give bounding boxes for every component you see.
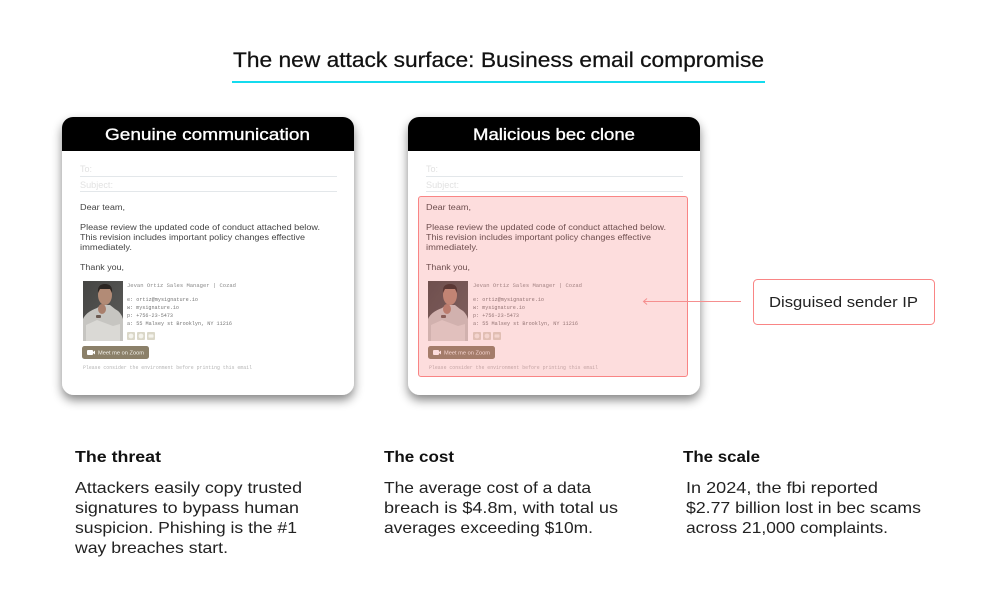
text block: the threat: signatures to bypass human <box>75 500 299 517</box>
email body text: Please review the updated code of conduct attached below. <box>80 222 320 232</box>
email body text: Dear team, <box>80 202 125 212</box>
highlight: cloned content overlay <box>418 196 688 376</box>
title: The new attack surface: Business email compromise <box>233 49 764 72</box>
panel: malicious bec clone email <box>408 117 700 395</box>
button: meet me on zoom <box>428 346 495 359</box>
email body text <box>80 202 320 272</box>
email address fields <box>80 164 337 192</box>
social icons <box>127 332 155 340</box>
email body text: immediately. <box>426 242 478 252</box>
email body text: Thank you, <box>426 262 470 272</box>
email body text: Dear team, <box>426 202 471 212</box>
callout: disguised sender ip <box>754 280 934 324</box>
text block: the cost <box>384 449 618 537</box>
email address fields: To: <box>80 164 92 174</box>
email signature details <box>127 283 236 327</box>
email body text <box>426 202 666 272</box>
email signature details <box>473 283 582 327</box>
text block: the scale: $2.77 billion lost in bec scams <box>686 500 921 517</box>
email signature photo <box>83 281 123 341</box>
text block: the scale <box>683 449 921 537</box>
email address fields: Subject: <box>80 180 113 190</box>
callout: disguised sender ip: Disguised sender IP <box>769 294 918 311</box>
text block: the threat: suspicion. Phishing is the #1 <box>75 520 297 537</box>
text block: the cost: The average cost of a data <box>384 480 591 497</box>
heading: the scale: The scale <box>683 449 760 466</box>
email address fields <box>426 164 683 192</box>
email body text: This revision includes important policy changes effective <box>80 232 305 242</box>
panel: genuine communication email <box>62 117 354 395</box>
email address fields: To: <box>426 164 438 174</box>
social icons <box>473 332 501 340</box>
email body text: Thank you, <box>80 262 124 272</box>
button: meet me on zoom <box>82 346 149 359</box>
email signature photo <box>428 281 468 341</box>
email body text: This revision includes important policy changes effective <box>426 232 651 242</box>
footer note: Please consider the environment before printing this email <box>83 365 252 371</box>
button: meet me on zoom: Meet me on Zoom <box>98 350 144 356</box>
text block: the scale: In 2024, the fbi reported <box>686 480 878 497</box>
card header: genuine communication <box>62 117 354 151</box>
text block: the threat: Attackers easily copy trusted <box>75 480 302 497</box>
arrow: callout to highlight <box>644 298 741 304</box>
footer note: Please consider the environment before printing this email <box>429 365 598 371</box>
email body text: immediately. <box>80 242 132 252</box>
card header: malicious bec clone <box>408 117 700 151</box>
card header: genuine communication: Genuine communication <box>105 126 310 144</box>
text block: the threat: way breaches start. <box>74 540 228 557</box>
email body text: Please review the updated code of conduct attached below. <box>426 222 666 232</box>
button: meet me on zoom: Meet me on Zoom <box>444 350 490 356</box>
card header: malicious bec clone: Malicious bec clone <box>473 126 635 144</box>
text block: the cost: averages exceeding $10m. <box>384 520 593 537</box>
email address fields: Subject: <box>426 180 459 190</box>
text block: the scale: across 21,000 complaints. <box>686 520 888 537</box>
heading: the cost: The cost <box>384 449 454 466</box>
text block: the threat <box>74 449 302 557</box>
text block: the cost: breach is $4.8m, with total us <box>384 500 618 517</box>
heading: the threat: The threat <box>75 449 161 466</box>
